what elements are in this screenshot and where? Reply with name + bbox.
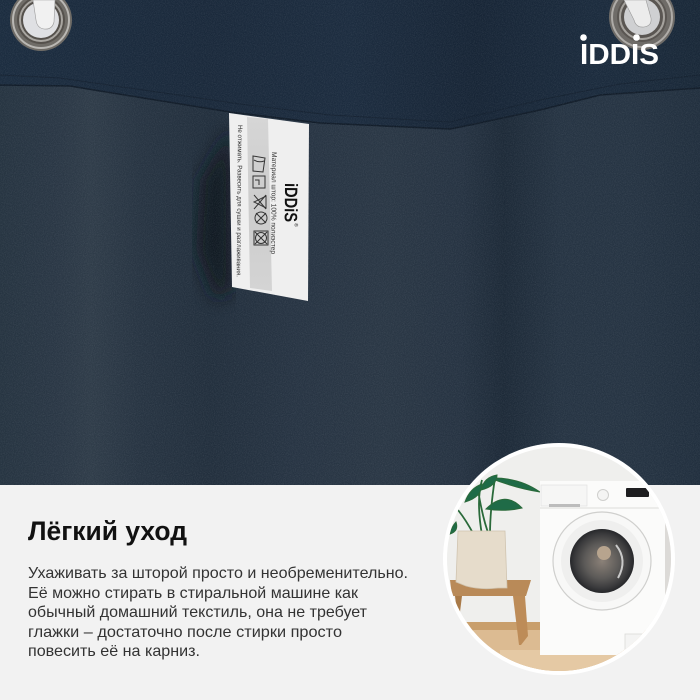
door [553,512,651,610]
washing machine body [540,481,665,655]
tote bag [456,531,507,589]
grey care strip [247,117,272,291]
display [626,488,649,497]
curtain top hem band [0,0,700,129]
tag shadow on fabric [196,125,232,300]
stool [450,580,531,645]
dial [598,490,608,500]
label care instruction text: Не отжимать. Развесить для сушки и разглаживания. [235,125,243,277]
body text block: Её можно стирать в стиральной машине как [28,585,359,602]
filter hatch [625,634,642,650]
care label tag [229,113,309,301]
label logo: ® [293,223,300,227]
curtain photo background [0,0,700,485]
right curtain grommet with hook [609,0,675,50]
bottom info panel background [0,485,700,700]
label logo: iDDiS [281,183,301,222]
heading: Лёгкий уход [28,516,187,546]
care icons [253,156,268,245]
brand logo iddis: IDDIS [580,39,659,71]
body text block: обычный домашний текстиль, она не требует [28,604,368,621]
plant [450,475,540,535]
label material text: Материал штор: 100% полиэстер [269,152,277,254]
baseboard and floor [466,622,540,631]
body text block: повесить её на карниз. [28,643,200,660]
left curtain grommet with hook [10,0,72,51]
body text block: глажки – достаточно после стирки просто [28,624,342,641]
body text block: Ухаживать за шторой просто и необременительно. [28,565,408,582]
body text block [28,565,408,660]
circular photo: washing machine [440,440,680,680]
wall [447,447,639,622]
